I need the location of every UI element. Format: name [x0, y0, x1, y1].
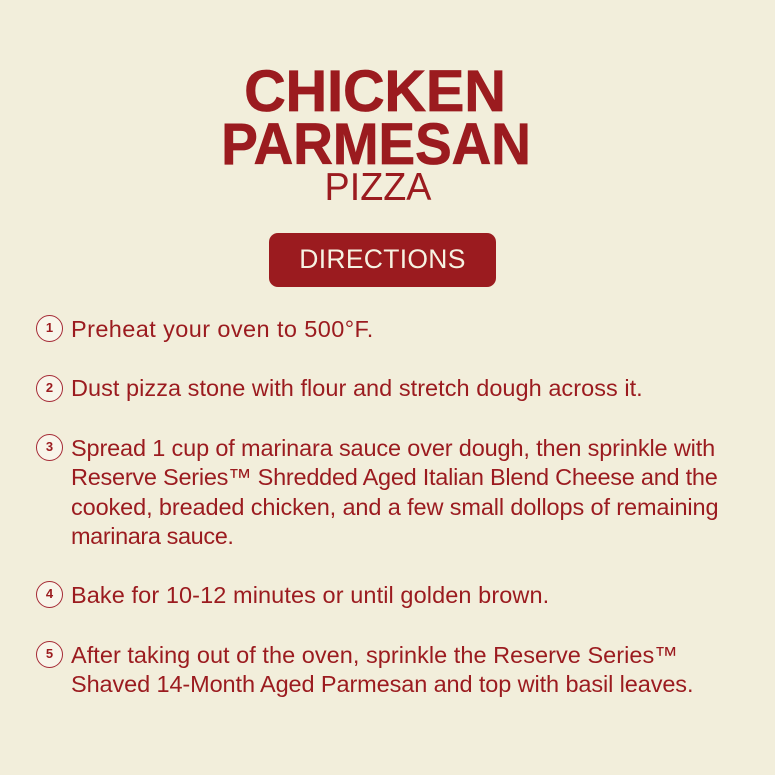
- step 5: [36, 641, 693, 697]
- title: PARMESAN: [221, 112, 531, 177]
- step 3: marinara sauce.: [71, 523, 234, 549]
- step 5: Shaved 14-Month Aged Parmesan and top with basil leaves.: [71, 670, 693, 696]
- step 2: 2: [46, 380, 53, 395]
- step 3: cooked, breaded chicken, and a few small dollops of remaining: [71, 494, 718, 520]
- step 5: After taking out of the oven, sprinkle the Reserve Series™: [71, 642, 678, 668]
- step 3: [36, 434, 718, 549]
- step 1: Preheat your oven to 500°F.: [71, 316, 374, 342]
- directions badge: [269, 233, 496, 287]
- step 1: 1: [46, 320, 53, 335]
- directions badge: DIRECTIONS: [299, 244, 466, 274]
- title: PIZZA: [325, 166, 431, 208]
- title: [221, 59, 531, 208]
- step 3: Reserve Series™ Shredded Aged Italian Blend Cheese and the: [71, 464, 718, 490]
- step 3: 3: [46, 439, 53, 454]
- title: CHICKEN: [244, 59, 506, 124]
- step 4: Bake for 10-12 minutes or until golden brown.: [71, 582, 549, 608]
- step 2: Dust pizza stone with flour and stretch dough across it.: [71, 375, 643, 401]
- step 4: 4: [46, 586, 53, 601]
- step 5: 5: [46, 646, 53, 661]
- step 3: Spread 1 cup of marinara sauce over dough, then sprinkle with: [71, 435, 715, 461]
